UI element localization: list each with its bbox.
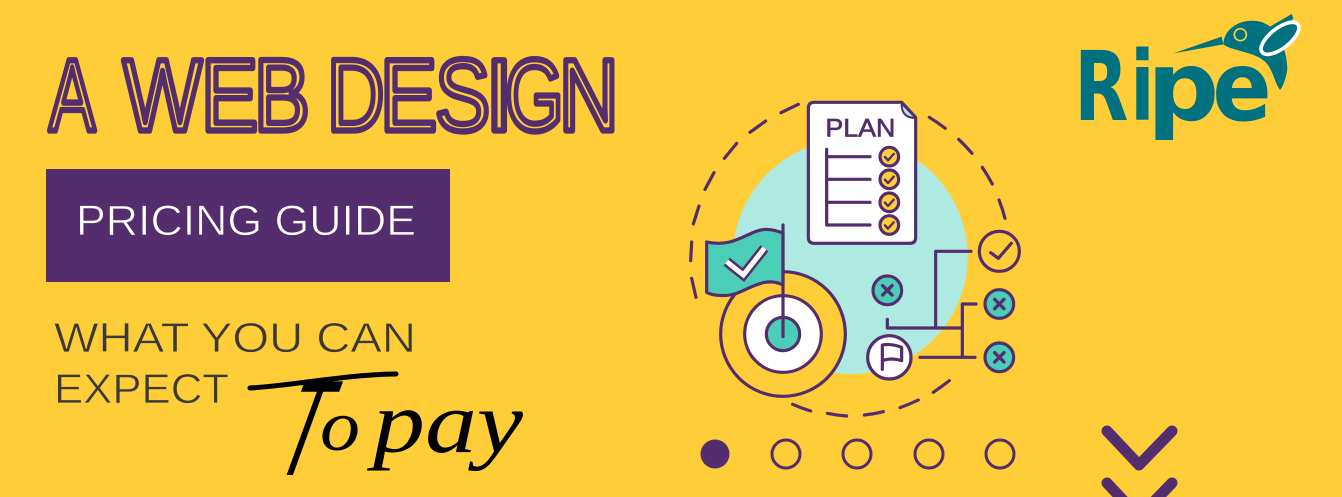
title: A Web Design — [49, 38, 619, 153]
checklist — [880, 147, 899, 234]
connector lines — [887, 251, 976, 357]
banner: pricing guide — [46, 169, 450, 282]
plan heading: PLAN — [825, 115, 895, 143]
subtitle: what you can expect — [54, 314, 416, 412]
logo wordmark — [1074, 31, 1272, 143]
logo: Ripe — [1074, 14, 1304, 143]
dashed ring — [691, 104, 1005, 416]
subtitle: what you can expect: EXPECT — [54, 365, 229, 412]
icon: cross circles — [873, 276, 1014, 372]
title: A Web Design: W — [123, 39, 202, 152]
title: A Web Design: S — [435, 38, 490, 152]
logo wordmark: p — [1147, 32, 1219, 143]
plan document — [808, 102, 916, 243]
subtitle: what you can expect: WHAT YOU CAN — [54, 314, 416, 361]
script text: to pay — [250, 352, 524, 497]
illustration: plan and target — [691, 102, 1019, 416]
title: A Web Design: A — [49, 39, 95, 153]
title: A Web Design: N — [559, 38, 619, 152]
logo bird — [1173, 14, 1304, 90]
logo wordmark: e — [1212, 31, 1272, 143]
logo wordmark: R — [1074, 31, 1128, 143]
scroll arrows — [1107, 431, 1172, 497]
script text: to pay: o — [320, 386, 360, 466]
title: A Web Design: G — [505, 40, 564, 153]
title: A Web Design: E — [201, 38, 258, 152]
target — [721, 272, 845, 396]
flag — [707, 225, 783, 337]
icon: check circle — [979, 231, 1019, 271]
icon: flag circle — [868, 336, 911, 379]
title: A Web Design: B — [254, 39, 310, 152]
mint background circle — [733, 139, 968, 374]
title: A Web Design: I — [485, 38, 513, 152]
title: A Web Design: E — [380, 38, 437, 152]
logo wordmark: i — [1130, 31, 1154, 143]
script text: to pay: pay — [366, 375, 524, 472]
banner: pricing guide: PRICING GUIDE — [76, 197, 416, 245]
title: A Web Design: D — [327, 39, 384, 153]
pagination dots — [700, 440, 1014, 468]
